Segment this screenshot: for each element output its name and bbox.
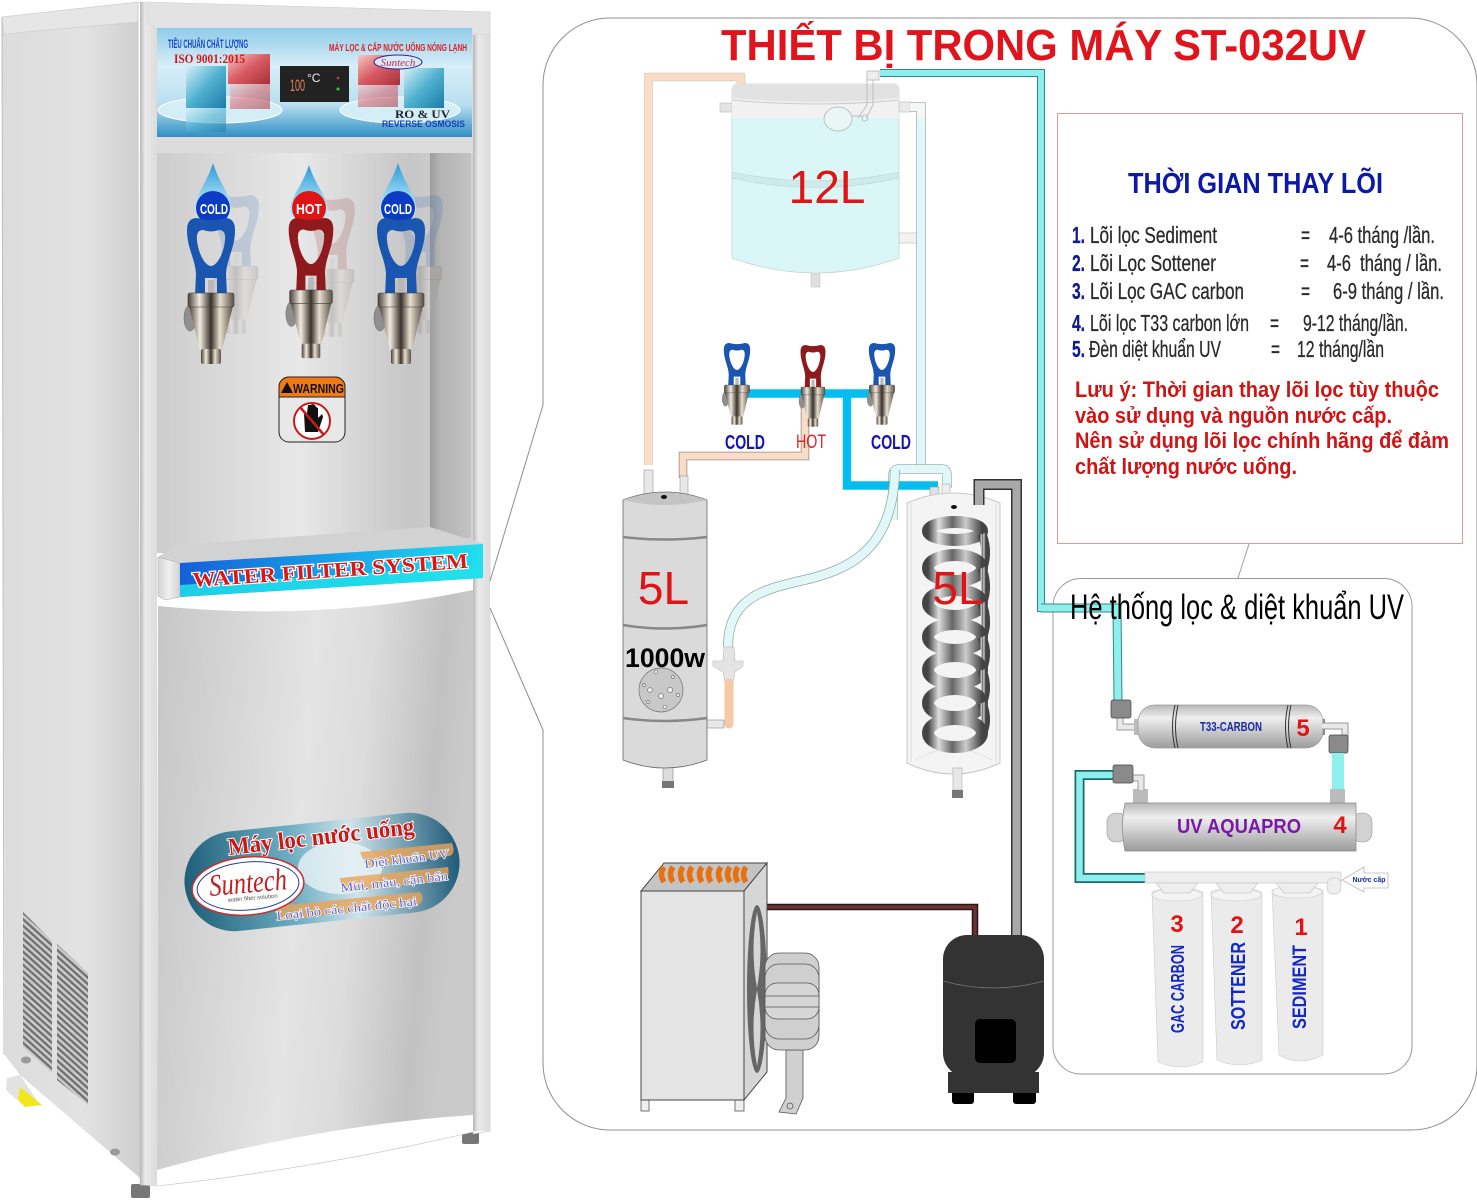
T33 label: T33-CARBON [1200,719,1262,734]
schedule item 4 [1072,310,1408,336]
schedule item 1: Lõi lọc Sediment [1090,222,1217,248]
panel: water dispenser machine [2,2,490,1198]
schedule item 2 [1072,250,1442,276]
arrow: hose from tank to hot tank [713,470,895,724]
sticker benefit line 1: Diệt khuẩn UV [364,847,450,871]
schedule item 5: 5. [1072,336,1085,362]
arrow: tank overflow and feed pipe [893,102,947,520]
schedule item 5: 12 tháng/lần [1297,336,1384,362]
banner product text: MÁY LỌC & CẤP NƯỚC UỐNG NÓNG LẠNH [329,40,467,54]
banner reverse osmosis text: REVERSE OSMOSIS [382,119,465,129]
filter cartridge 3 [1152,887,1203,1067]
arrow: hot return pipe to tank [648,77,741,465]
sticker benefit line 3: Loại bỏ các chất độc hại [276,894,418,923]
banner logo: Suntech [381,57,416,69]
tank volume label: 12L [789,161,865,213]
Suntech logo: Suntech [208,861,288,903]
Suntech logo: water filter solution [227,894,278,904]
pipe: inlet into filtration box [1041,608,1118,700]
schedule item 2: 2. [1072,250,1085,276]
heater disc [639,668,683,712]
panel: 5L cold water tank with coil [907,484,1000,798]
number 4: 4 [1333,812,1347,839]
faucet: hot: HOT [296,201,322,218]
pipe: T33 to UV [1332,753,1344,790]
sticker benefit line 2: Mùi, màu, cặn bẩn [340,869,449,895]
label: hot: HOT [796,432,826,453]
banner quality text: TIÊU CHUẨN CHẤT LƯỢNG [168,36,248,51]
UV lamp [1107,765,1372,851]
filter cartridge 2: SOTTENER [1228,942,1250,1030]
schedule item 4: = [1270,310,1279,336]
UV label: UV AQUAPRO [1177,816,1301,838]
schedule item 4: Lõi lọc T33 carbon lớn [1090,310,1249,336]
callout connector [1238,544,1249,578]
faucet: cold left: COLD [200,201,228,218]
faucet shadows [210,195,443,337]
faucet: hot [286,165,333,358]
filter manifold [1145,872,1341,894]
note text [1075,377,1449,479]
label: cold: COLD [725,432,765,454]
warning sign: WARNING [293,381,344,396]
schedule item 1: 4-6 tháng /lần. [1329,222,1435,248]
side ventilation grilles [23,912,88,1105]
schedule item 1 [1072,222,1435,248]
arrow: refrigerant pipe [979,484,1016,936]
shelf with product strip [158,527,484,600]
sticker heading: Máy lọc nước uống [227,814,415,861]
faucet: cold left [184,163,235,364]
arrow: feed water inlet [1342,867,1388,892]
cold tank volume label: 5L [932,562,984,614]
machine front frame [138,2,490,1186]
T33 carbon filter [1111,700,1348,753]
panel: 12L cold water tank [720,71,899,287]
schedule heading: THỜI GIAN THAY LÕI [1128,166,1383,200]
digital temperature display [280,66,349,102]
number 5: 5 [1296,715,1310,742]
schedule item 1: = [1301,222,1310,248]
schedule item 1: 1. [1072,222,1085,248]
faucet: cold right [374,163,425,364]
filter cartridge 1: SEDIMENT [1290,945,1311,1029]
panel: 5L hot water tank [623,470,724,788]
arrow: condenser line to compressor [767,907,975,936]
banner logo [374,55,422,69]
schedule item 3 [1072,278,1444,304]
condenser fan [747,905,767,1073]
arrow: cold supply to tank top [880,73,1118,700]
top display banner [157,28,472,137]
note text: Nên sử dụng lõi lọc chính hãng để đảm [1075,428,1449,453]
schedule item 5: = [1271,336,1280,362]
filter cartridge 3: GAC CARBON [1168,945,1188,1033]
heater power label: 1000w [625,643,706,673]
dispensing recess [157,153,473,553]
cooling coil [928,522,986,747]
note text: Lưu ý: Thời gian thay lõi lọc tùy thuộc [1075,377,1439,402]
filter cartridge 1: 1 [1294,914,1308,941]
note text: chất lượng nước uống. [1075,454,1297,479]
strip text: WATER FILTER SYSTEM [192,549,469,592]
hot tank volume label: 5L [638,562,689,614]
title: THIẾT BỊ TRONG MÁY ST-032UV [721,20,1367,70]
label: cold right: COLD [871,432,911,454]
float valve [824,71,879,131]
arrow: cold supply fill [880,73,1118,700]
arrow: cold water manifold [747,394,938,486]
filter cartridge 2: 2 [1230,912,1244,939]
machine side panel [2,2,140,1178]
panel: filtration system [1041,578,1412,1074]
machine feet [131,1130,479,1198]
banner ISO text: ISO 9001:2015 [174,51,245,66]
digital temperature display: 100 [290,76,305,95]
small faucets [722,343,895,427]
note text: vào sử dụng và nguồn nước cấp. [1075,403,1392,428]
filter cartridge 3: 3 [1170,911,1184,938]
faucet: cold right: COLD [384,201,412,218]
panel: condenser unit [641,863,819,1114]
pipe: UV to filters [1080,775,1146,878]
schedule item 3: Lõi Lọc GAC carbon [1090,278,1244,304]
warning sign [279,377,345,442]
schedule item 4: 4. [1072,310,1085,336]
banner RO UV text: RO & UV [395,107,450,121]
lower door panel [157,590,473,1170]
Suntech logo [190,852,306,920]
panel: replacement schedule [1058,114,1462,544]
condenser coils [662,867,746,882]
filter cartridge 1 [1272,885,1323,1061]
schedule item 2: = [1300,250,1309,276]
filter cartridge 2 [1211,887,1262,1065]
schedule item 3: = [1301,278,1310,304]
panel: compressor [943,935,1044,1104]
schedule item 4: 9-12 tháng/lần. [1303,310,1408,336]
product sticker [180,808,464,936]
arrow: hot water pipe [683,402,805,478]
fan motor [765,953,819,1114]
schedule item 2: Lõi Lọc Sottener [1090,250,1216,276]
digital temperature display: °C [307,71,321,85]
schedule item 3: 3. [1072,278,1085,304]
schedule item 5 [1072,336,1384,362]
schedule item 5: Đèn diệt khuẩn UV [1089,336,1221,362]
panel: internal equipment outline [490,18,1477,1130]
arrow: feed water inlet: Nước cấp [1352,876,1386,884]
